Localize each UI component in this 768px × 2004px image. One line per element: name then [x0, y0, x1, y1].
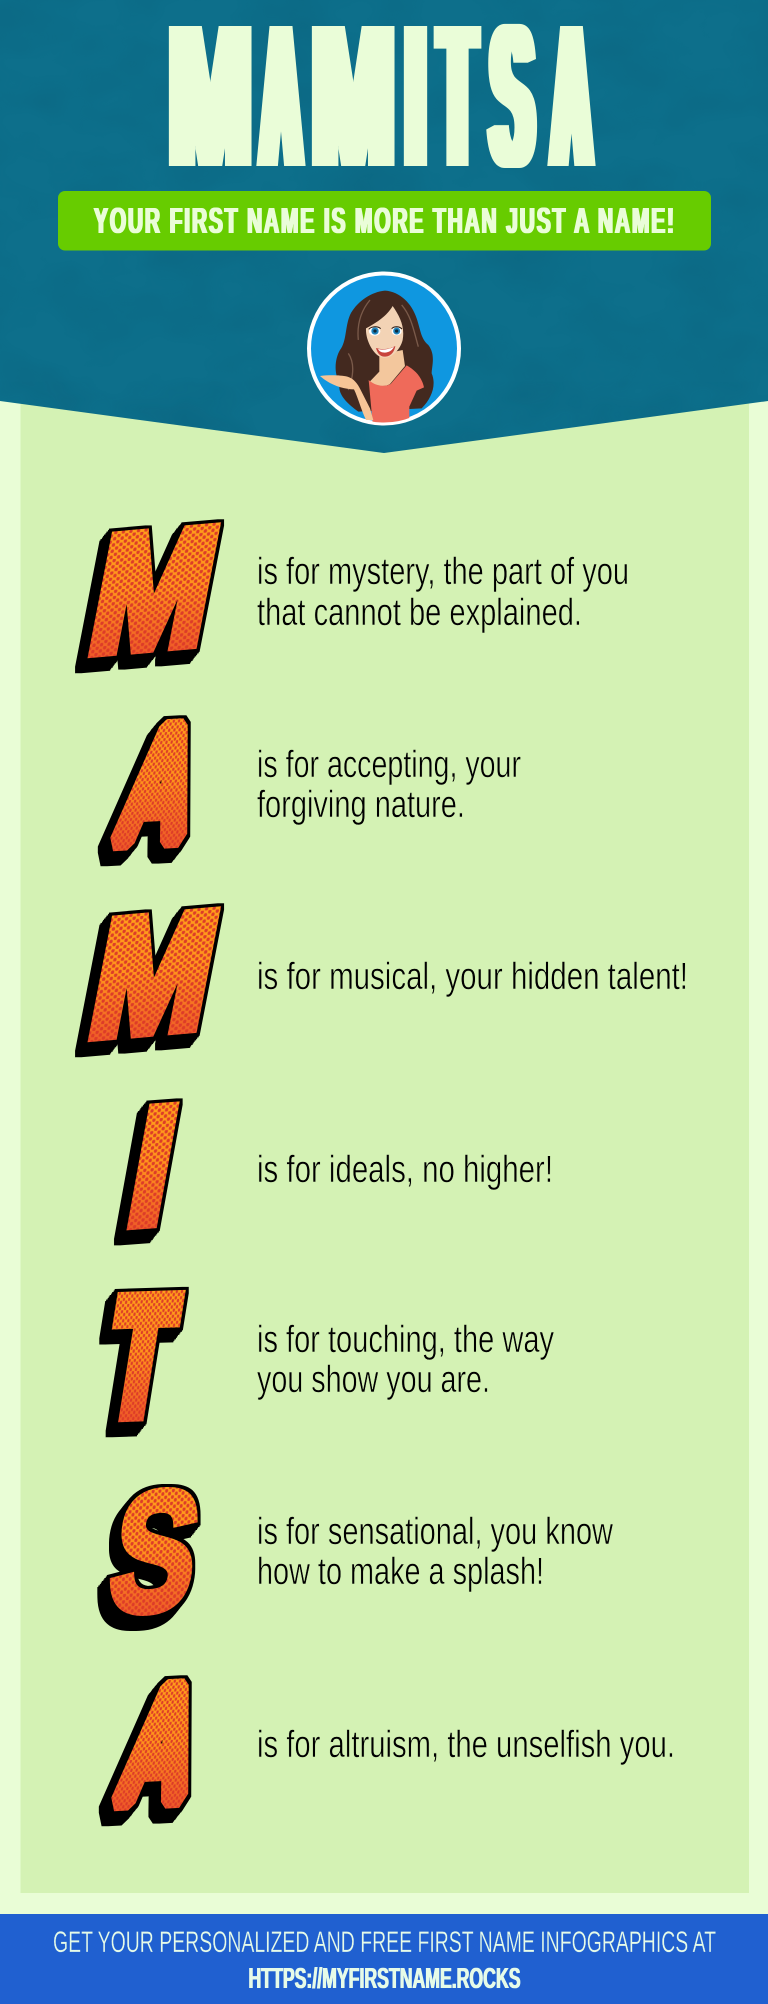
arm	[320, 375, 373, 420]
comic letter T: T	[97, 1265, 185, 1448]
description S: how to make a splash!	[257, 1551, 544, 1593]
row 4: letter I	[118, 1073, 553, 1260]
row 1: letter M	[78, 493, 629, 687]
footer url: HTTPS://MYFIRSTNAME.ROCKS	[248, 1963, 520, 1995]
comic letter A: A	[105, 693, 216, 875]
footer	[0, 1914, 768, 2004]
smile	[376, 346, 395, 357]
subtitle banner	[58, 191, 711, 250]
description I: is for ideals, no higher!	[257, 1149, 553, 1191]
description A: is for accepting, your	[257, 744, 521, 786]
description S	[257, 1511, 613, 1593]
description T	[257, 1319, 554, 1401]
avatar	[309, 274, 459, 424]
eyes	[369, 327, 380, 336]
row 7: letter A	[106, 1653, 675, 1835]
comic letter I: I	[118, 1073, 188, 1260]
description S: is for sensational, you know	[257, 1511, 613, 1553]
description T: is for touching, the way	[257, 1319, 554, 1361]
comic letter M: M	[78, 877, 231, 1071]
row 2: letter A	[105, 693, 521, 875]
description T: you show you are.	[257, 1359, 490, 1401]
face	[366, 306, 403, 358]
neck	[370, 350, 405, 386]
description A: forgiving nature.	[257, 784, 465, 826]
description M: is for mystery, the part of you	[257, 551, 629, 593]
comic letter S: S	[100, 1454, 211, 1648]
comic letter M: M	[78, 493, 231, 687]
row 5: letter T	[97, 1265, 554, 1448]
hair	[336, 291, 434, 412]
subtitle banner: YOUR FIRST NAME IS MORE THAN JUST A NAME!	[94, 201, 674, 242]
description M: that cannot be explained.	[257, 592, 582, 634]
row 6: letter S	[100, 1454, 613, 1648]
comic letter A: A	[106, 1653, 217, 1835]
row 3: letter M	[78, 877, 688, 1071]
description A	[257, 744, 521, 826]
description M	[257, 551, 629, 634]
header	[0, 0, 768, 453]
content panel	[20, 380, 749, 1893]
shirt	[369, 365, 424, 423]
